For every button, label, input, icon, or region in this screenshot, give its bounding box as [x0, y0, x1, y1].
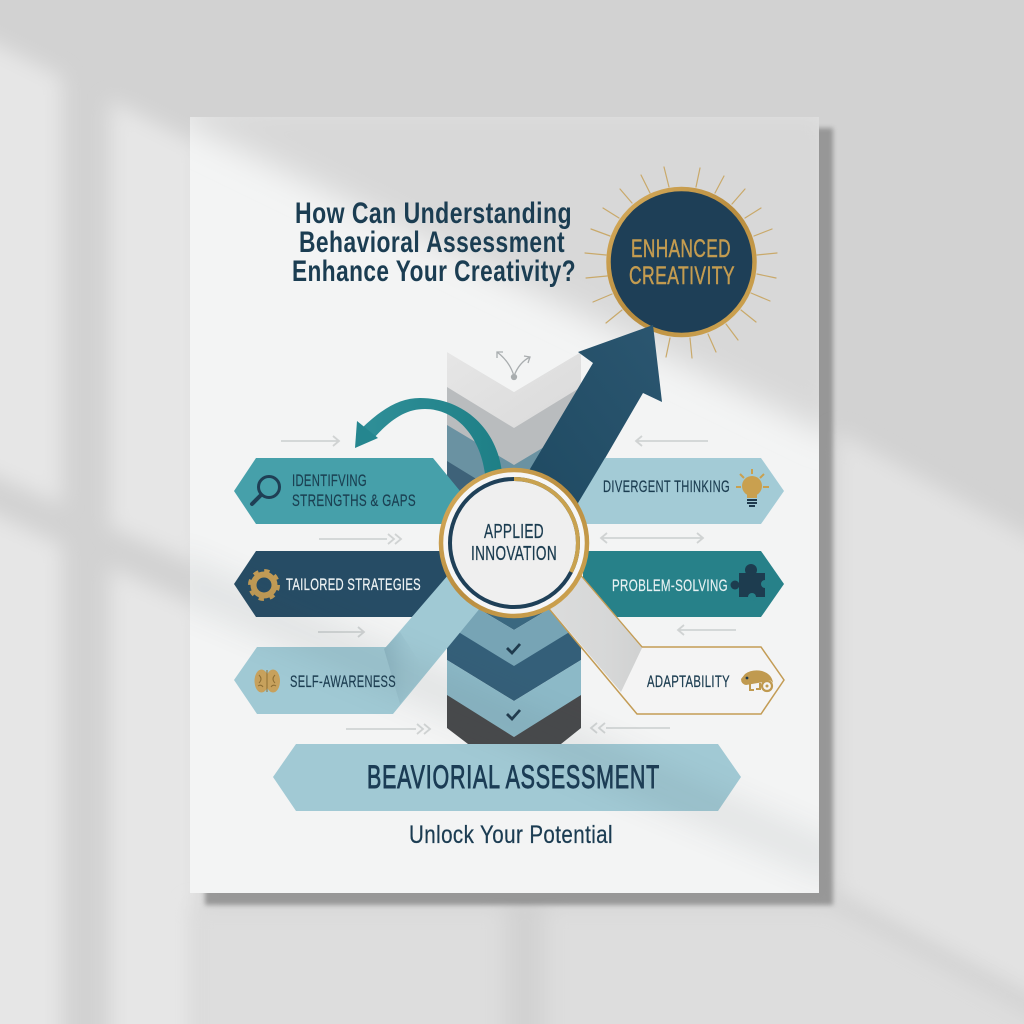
panel: divergent thinking: DIVERGENT THINKING [603, 477, 730, 496]
icon: magnifying glass [252, 476, 280, 504]
banner: behavioral assessment [273, 744, 741, 811]
flow arrows [281, 436, 736, 734]
icon: chameleon [741, 670, 773, 691]
panel: adaptability: ADAPTABILITY [647, 672, 730, 691]
arrow: curved teal arrow [355, 398, 502, 474]
panel: tailored strategies: TAILORED STRATEGIES [286, 575, 421, 594]
badge: enhanced creativity [608, 189, 754, 335]
badge: applied innovation: APPLIED [484, 521, 544, 543]
panel: problem-solving [583, 551, 784, 617]
icon: light bulb [736, 469, 769, 506]
panel: problem-solving: PROBLEM-SOLVING [612, 576, 728, 595]
panel: self-awareness: SELF-AWARENESS [290, 672, 396, 691]
icon: check marks [507, 644, 520, 719]
poster shadow [205, 128, 833, 905]
central chevron column [447, 352, 581, 750]
panel: identifying strengths and gaps: STRENGTHS & GAPS [292, 491, 416, 510]
panel: identifying strengths and gaps [234, 458, 460, 524]
title: Enhance Your Creativity? [292, 255, 576, 288]
badge: enhanced creativity: ENHANCED [631, 235, 731, 263]
banner: behavioral assessment: BEAVIORIAL ASSESSMENT [367, 759, 660, 795]
icon: sun rays [585, 167, 777, 358]
icon: puzzle piece [730, 564, 769, 601]
poster sheet [170, 100, 840, 893]
panel: identifying strengths and gaps: IDENTIFVING [292, 471, 367, 490]
panel: divergent thinking [578, 458, 784, 524]
icon: brain [254, 670, 280, 692]
badge: enhanced creativity: CREATIVITY [629, 262, 735, 290]
arrow: rising navy arrow [527, 325, 662, 510]
title: Behavioral Assessment [299, 226, 565, 259]
icon: small branching arrows [497, 352, 530, 380]
title: How Can Understanding [295, 197, 572, 230]
panel: self-awareness [234, 567, 495, 714]
title [292, 197, 576, 288]
tagline: Unlock Your Potential [409, 821, 613, 849]
badge: applied innovation [441, 470, 587, 616]
icon: gear [250, 572, 278, 598]
panel: tailored strategies [234, 551, 455, 617]
panel: adaptability [535, 557, 784, 714]
badge: applied innovation: INNOVATION [471, 543, 557, 565]
